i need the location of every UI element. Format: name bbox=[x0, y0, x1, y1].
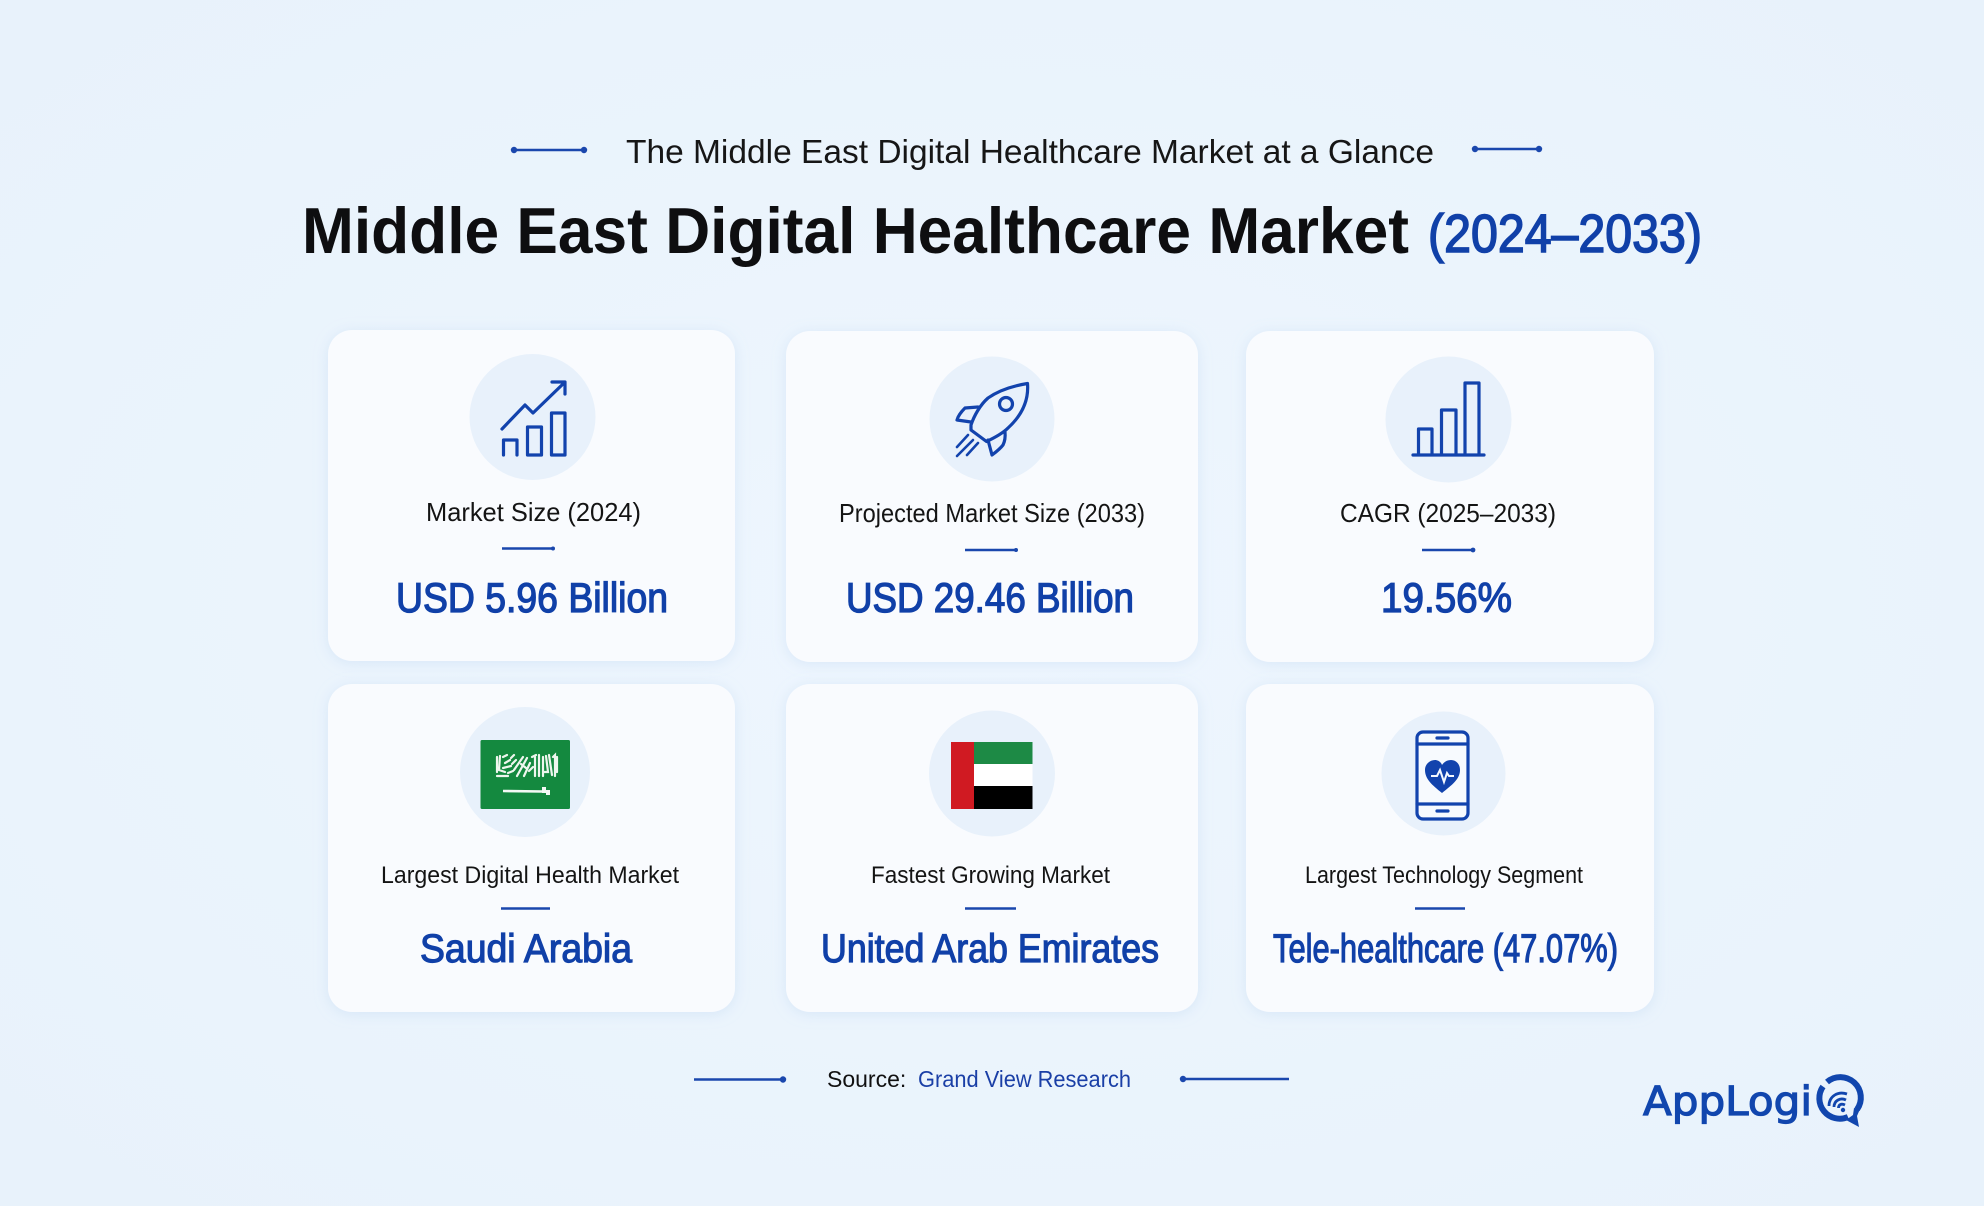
icon: bar chart bbox=[1386, 356, 1512, 482]
value: USD 5.96 Billion bbox=[396, 574, 668, 621]
icon: rising chart bbox=[470, 354, 596, 480]
panel: projected market size 2033 bbox=[786, 331, 1198, 662]
panel: largest digital health market bbox=[328, 684, 735, 1012]
divider bbox=[965, 907, 1016, 910]
divider bbox=[501, 907, 550, 910]
logo: AppLogiQ bbox=[1643, 1077, 1861, 1127]
value: 19.56% bbox=[1381, 574, 1512, 621]
icon: phone with heart bbox=[1382, 712, 1506, 836]
value: USD 29.46 Billion bbox=[846, 574, 1134, 621]
value: Tele-healthcare (47.07%) bbox=[1273, 927, 1618, 971]
panel: CAGR bbox=[1246, 331, 1654, 662]
panel: largest technology segment bbox=[1246, 684, 1654, 1012]
icon: UAE flag bbox=[929, 710, 1055, 836]
divider bbox=[1422, 548, 1475, 552]
divider bbox=[502, 546, 555, 550]
source line: Source: bbox=[827, 1066, 906, 1092]
logo: AppLogiQ: AppLogi bbox=[1643, 1079, 1812, 1125]
panel: market size 2024 bbox=[328, 330, 735, 661]
label: CAGR (2025–2033) bbox=[1340, 498, 1556, 528]
label: Fastest Growing Market bbox=[871, 862, 1110, 889]
divider bbox=[1415, 907, 1465, 910]
value: United Arab Emirates bbox=[821, 927, 1159, 971]
header bbox=[302, 133, 1702, 267]
icon: rocket bbox=[930, 356, 1054, 482]
panel: fastest growing market bbox=[786, 684, 1198, 1012]
label: Largest Digital Health Market bbox=[381, 862, 679, 889]
label: Market Size (2024) bbox=[426, 497, 641, 527]
label: Projected Market Size (2033) bbox=[839, 498, 1145, 528]
value: Saudi Arabia bbox=[420, 927, 633, 971]
label: Largest Technology Segment bbox=[1305, 862, 1583, 889]
source line bbox=[694, 1066, 1289, 1092]
icon: Saudi Arabia flag bbox=[460, 707, 590, 837]
divider bbox=[965, 548, 1018, 552]
source line: Grand View Research bbox=[918, 1066, 1131, 1092]
subtitle: The Middle East Digital Healthcare Market at a Glance bbox=[626, 133, 1434, 170]
title: Middle East Digital Healthcare Market bbox=[302, 194, 1409, 267]
title: (2024–2033) bbox=[1428, 204, 1702, 264]
